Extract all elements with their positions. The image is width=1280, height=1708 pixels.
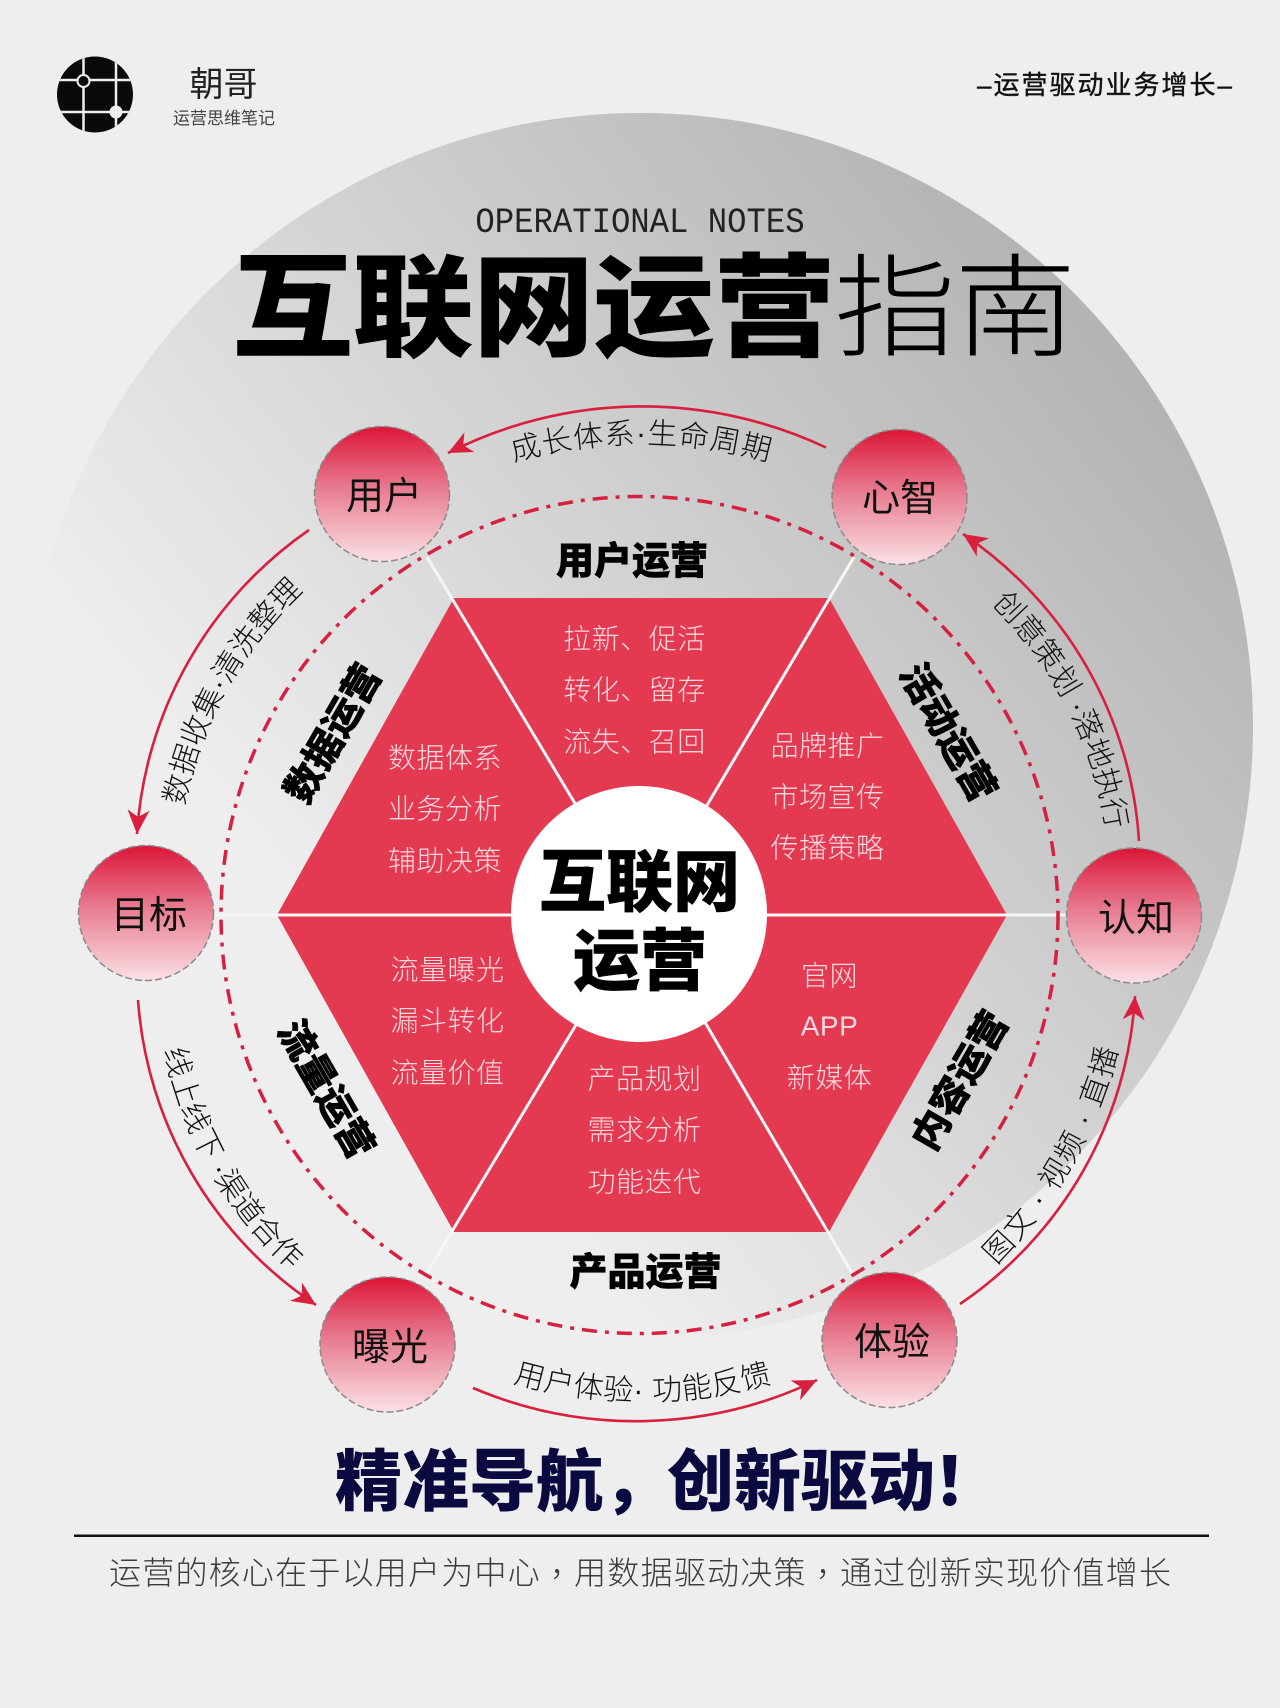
panel: content operations: 官网	[801, 960, 858, 992]
heading: 流量运营: 流量运营	[269, 1014, 381, 1166]
node: 用户: 用户	[346, 476, 422, 518]
panel: activity operations: 市场宣传	[770, 782, 885, 812]
footer summary: 通过创新实现价值增长	[840, 1555, 1171, 1591]
brand subtitle: 运营思维笔记	[173, 109, 275, 128]
panel: data operations	[388, 742, 502, 876]
center circle: 互联网	[539, 846, 740, 920]
panel: product operations: 需求分析	[587, 1114, 702, 1146]
english subtitle: OPERATIONAL NOTES	[475, 204, 805, 243]
heading: 产品运营: 产品运营	[569, 1252, 722, 1294]
panel: data operations: 业务分析	[388, 794, 502, 824]
main title: 互联网运营指南	[232, 246, 1075, 371]
arrow: 体验 to 认知	[959, 996, 1144, 1306]
panel: activity operations: 传播策略	[770, 832, 885, 864]
center circle: 运营	[573, 924, 707, 1000]
red hexagon	[277, 598, 1007, 1232]
panel: data operations: 辅助决策	[388, 846, 502, 876]
panel: content operations	[787, 960, 872, 1094]
heading: 活动运营: 活动运营	[891, 657, 1003, 809]
node: 认知	[1066, 848, 1202, 983]
arrow: 用户 to 目标: 数据收集·清洗整理	[161, 576, 304, 805]
panel: product operations: 产品规划	[587, 1064, 702, 1094]
panel: traffic operations: 流量曝光	[390, 954, 505, 986]
node: 曝光	[320, 1277, 455, 1412]
arrow: 曝光 to 体验	[472, 1361, 818, 1422]
node: 目标	[78, 846, 214, 980]
node: 心智	[832, 430, 967, 564]
arrow: 目标 to 曝光: 线上线下 ·渠道合作	[164, 1048, 304, 1266]
node: 体验: 体验	[854, 1322, 930, 1364]
panel: traffic operations	[390, 954, 505, 1088]
node: 认知: 认知	[1098, 898, 1174, 940]
top right slogan: –运营驱动业务增长–	[977, 70, 1234, 100]
panel: user operations: 流失、召回	[563, 726, 706, 758]
panel: traffic operations: 流量价值	[390, 1058, 505, 1088]
heading: 用户运营: 用户运营	[556, 541, 708, 583]
panel: user operations	[563, 624, 706, 758]
arrow: 用户 to 目标	[128, 528, 310, 834]
heading: 数据运营: 数据运营	[278, 658, 390, 810]
panel: content operations: 新媒体	[787, 1062, 872, 1094]
node: 目标: 目标	[111, 895, 187, 937]
footer rule	[74, 1534, 1209, 1537]
footer summary: 运营的核心在于以用户为中心	[109, 1555, 540, 1591]
center circle	[511, 786, 767, 1042]
large grey gradient circle	[27, 113, 1253, 1339]
panel: activity operations: 品牌推广	[770, 730, 885, 762]
panel: product operations: 功能迭代	[587, 1166, 702, 1198]
slogan: 精准导航，	[335, 1445, 670, 1520]
slogan: 创新驱动	[667, 1445, 935, 1520]
arrow: 心智 to 用户: 成长体系·生命周期	[512, 419, 772, 463]
panel: user operations: 拉新、促活	[563, 624, 706, 654]
arrow: 认知 to 心智	[962, 532, 1140, 842]
arrow: 认知 to 心智: 创意策划 ·落地执行	[994, 593, 1130, 826]
arrow: 心智 to 用户	[448, 405, 826, 463]
node: 用户	[314, 426, 450, 562]
node: 心智: 心智	[862, 478, 938, 520]
panel: activity operations	[770, 730, 885, 864]
arrow: 体验 to 认知: 图文 · 视频 · 直播	[980, 1046, 1120, 1265]
node: 曝光: 曝光	[352, 1327, 428, 1369]
arrow: 曝光 to 体验: 用户体验· 功能反馈	[514, 1361, 770, 1402]
panel: product operations	[587, 1064, 702, 1198]
panel: traffic operations: 漏斗转化	[390, 1006, 505, 1036]
icon: brand logo	[57, 56, 133, 133]
panel: user operations: 转化、留存	[563, 674, 706, 706]
dash-dot ring	[221, 496, 1058, 1334]
heading: 内容运营: 内容运营	[904, 1004, 1017, 1157]
footer summary: ，	[816, 1547, 848, 1583]
brand name: 朝哥	[190, 66, 258, 104]
panel: data operations: 数据体系	[388, 742, 502, 774]
arrow: 目标 to 曝光	[136, 1000, 317, 1306]
footer summary: ，	[550, 1547, 582, 1583]
node: 体验	[822, 1272, 957, 1408]
hexagon dividers	[205, 557, 1070, 1273]
panel: content operations: APP	[801, 1010, 858, 1042]
slogan: ！	[933, 1445, 1000, 1520]
footer summary: 用数据驱动决策	[574, 1555, 806, 1591]
